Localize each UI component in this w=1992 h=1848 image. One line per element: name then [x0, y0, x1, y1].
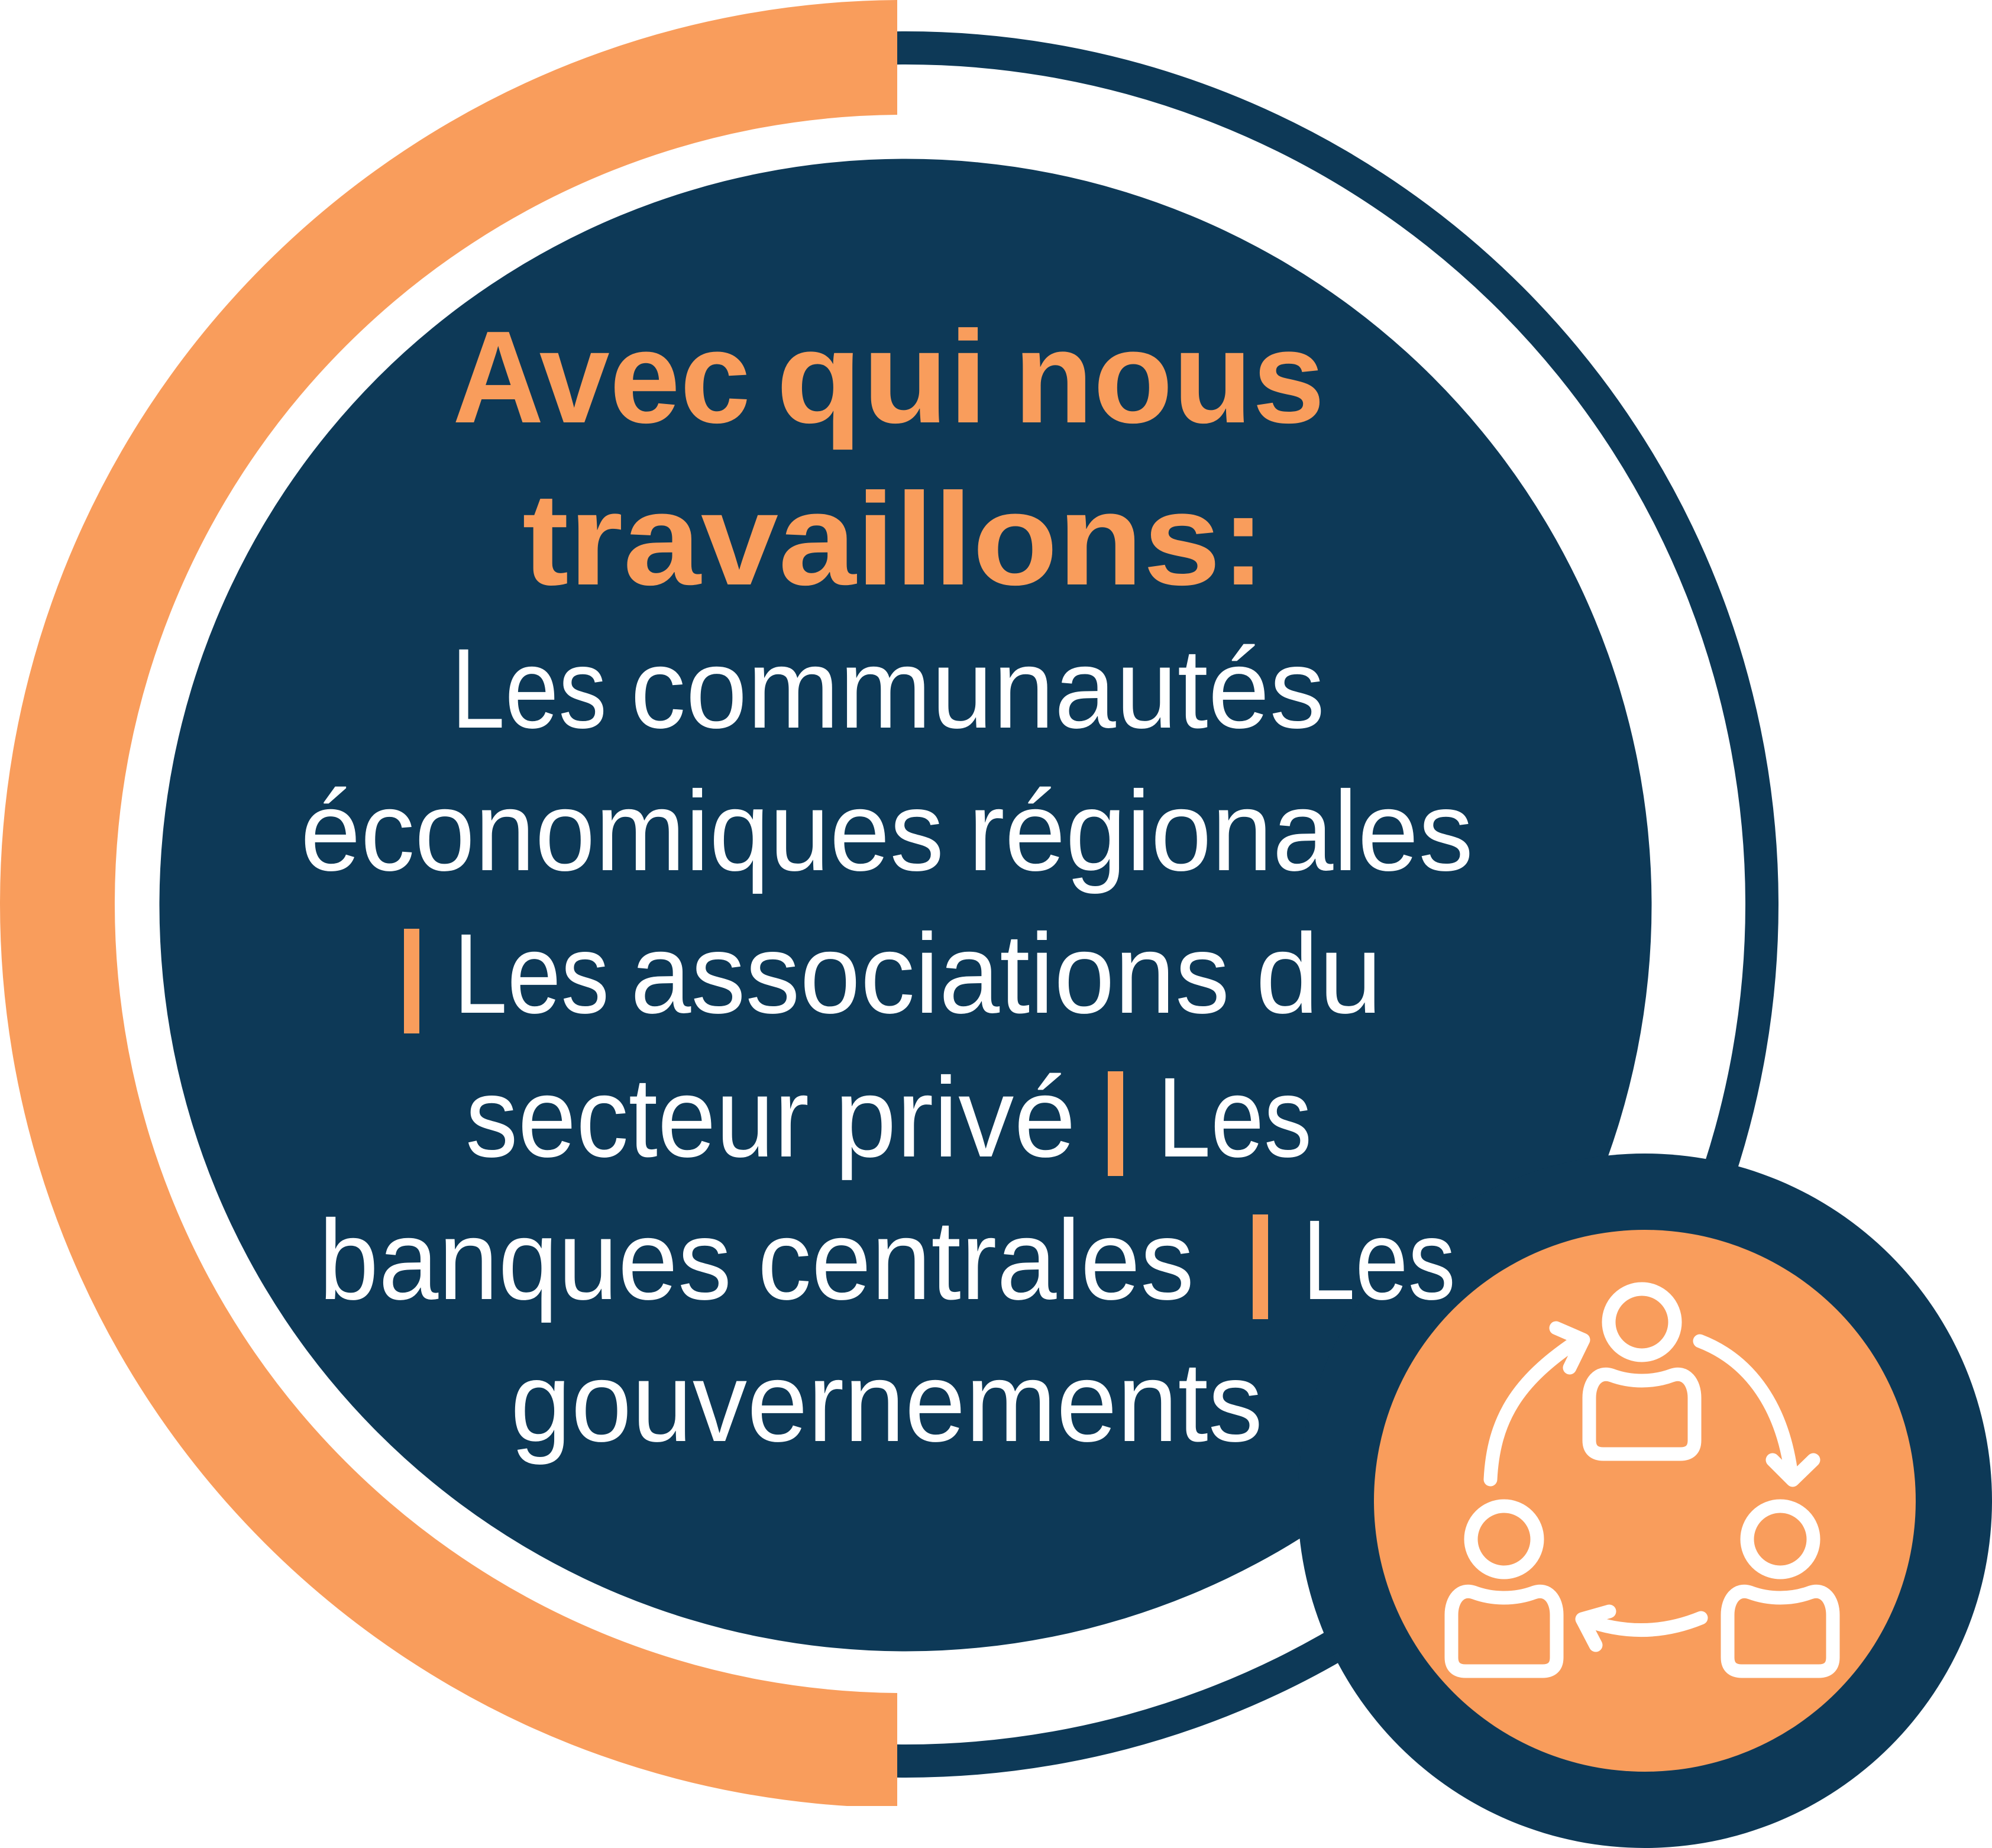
body text: partner list [300, 625, 1473, 1465]
body text: partner list: Les [454, 910, 609, 1037]
body text: partner list: Les [1302, 1196, 1456, 1323]
body text: partner list: associations [630, 910, 1230, 1037]
navy main disc [160, 159, 1651, 1652]
title: : [1221, 466, 1265, 613]
body text: partner list: gouvernements [510, 1338, 1263, 1465]
icon: left person [1451, 1506, 1557, 1671]
outer navy ring [49, 48, 1762, 1761]
icon: three people in a cycle [1451, 1289, 1833, 1671]
badge orange disc [1374, 1230, 1916, 1772]
arrow: top person to right person [1700, 1341, 1813, 1480]
body text: partner list: banques [319, 1196, 732, 1323]
title: qui [776, 304, 988, 451]
arrow: left person to top person [1490, 1328, 1583, 1479]
body text: partner list: économiques [300, 767, 944, 894]
body text: partner list: régionales [968, 767, 1473, 894]
body text: partner list: secteur [465, 1054, 809, 1181]
icon: top person [1589, 1289, 1695, 1454]
icon badge [1298, 1154, 1992, 1848]
body text: partner list: Les [1157, 1054, 1312, 1181]
body text: partner list: privé [835, 1054, 1076, 1181]
badge navy disc [1298, 1154, 1992, 1848]
title: Avec [452, 304, 751, 451]
body text: partner list: Les [451, 625, 607, 752]
icon: right person [1728, 1506, 1833, 1671]
title: travaillons [522, 466, 1221, 613]
body text: partner list: communautés [630, 625, 1325, 752]
orange half ring [0, 0, 897, 1806]
body text: partner list: du [1256, 910, 1382, 1037]
arrow: right person to left person [1582, 1611, 1701, 1645]
body text: partner list: centrales [758, 1196, 1194, 1323]
title [452, 304, 1325, 613]
title: nous [1014, 304, 1325, 451]
